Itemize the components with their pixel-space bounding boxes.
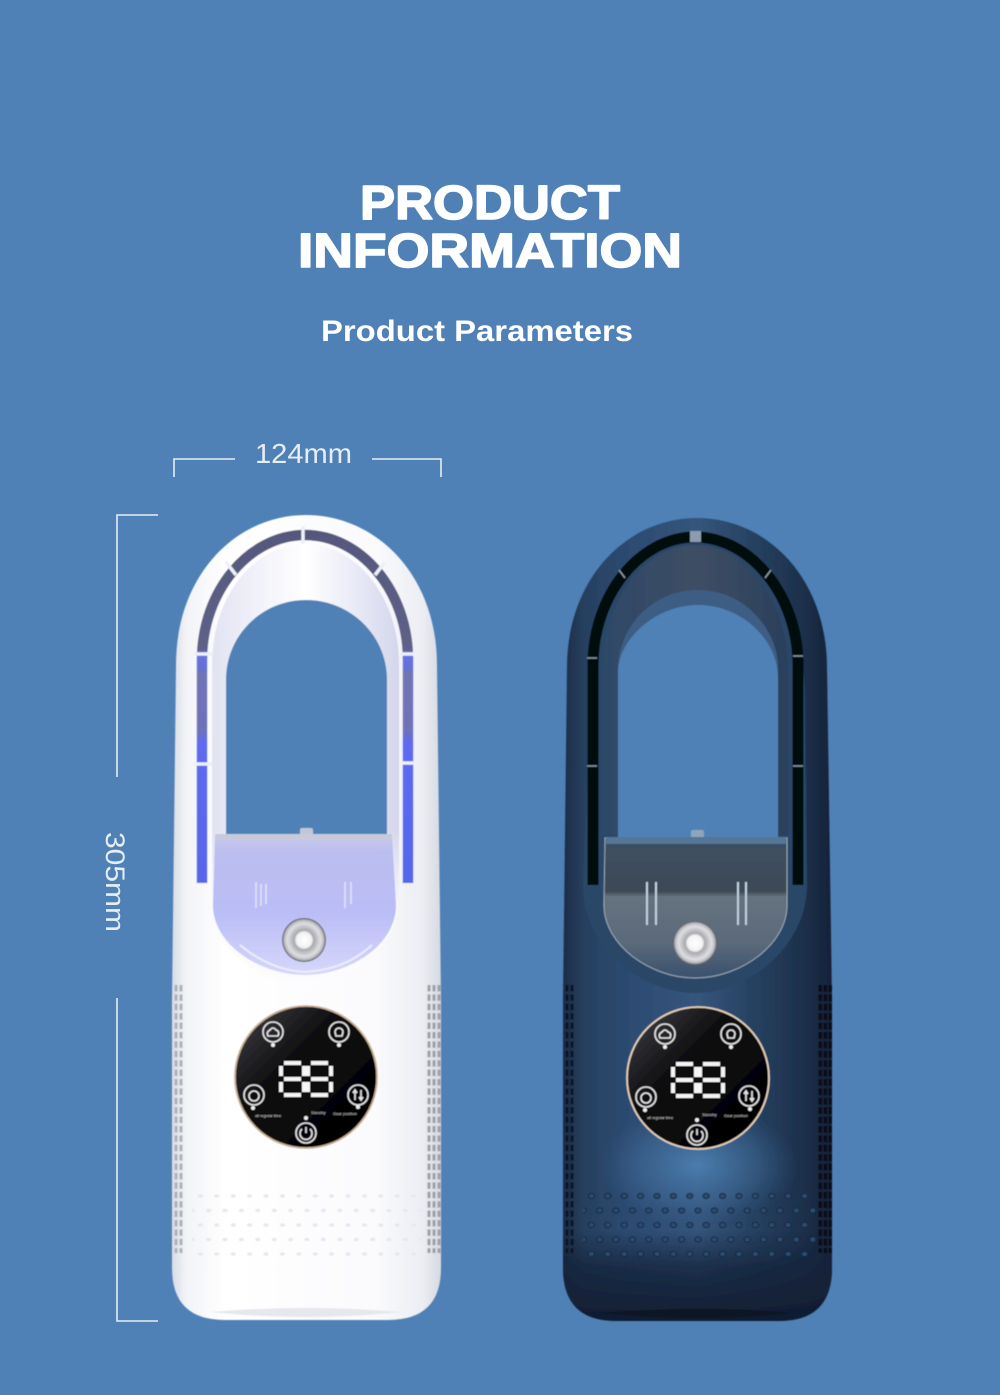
white fan collar arch: [212, 544, 399, 985]
white fan control panel: [235, 1006, 377, 1148]
width dimension: [174, 438, 441, 477]
white fan bottom dots: [192, 1190, 422, 1260]
dark fan base rim: [601, 1309, 793, 1318]
white fan body: [172, 515, 441, 1320]
width dimension: 124mm: [255, 438, 352, 469]
dark fan control panel: Standby: [702, 1112, 717, 1117]
dark fan knob: [673, 921, 717, 965]
title: PRODUCT: [360, 177, 620, 230]
digits: [673, 1064, 723, 1096]
dark fan control panel: [627, 1007, 769, 1149]
title: [298, 177, 682, 278]
dark fan side grills: [565, 985, 832, 1253]
dark fan opening: [618, 590, 778, 838]
white fan side grills: [174, 985, 441, 1253]
panel icons: [244, 1022, 368, 1143]
white fan control panel: Gear position: [333, 1111, 357, 1116]
title: INFORMATION: [298, 225, 682, 278]
dark fan air slot: [587, 531, 803, 885]
white fan opening: [226, 600, 387, 835]
dark fan water tank: [604, 830, 787, 978]
white fan water tank: [213, 828, 396, 975]
digits: [281, 1063, 331, 1095]
dark fan bottom dots: [583, 1190, 815, 1260]
white fan control panel: all regular time: [255, 1113, 282, 1118]
white fan air slot: [194, 526, 418, 883]
dark fan body: [563, 518, 832, 1321]
subtitle: Product Parameters: [321, 315, 633, 348]
dark fan control panel: Gear position: [724, 1113, 748, 1118]
dark fan: [563, 518, 832, 1321]
height dimension: 305mm: [100, 832, 130, 932]
white fan control panel: Standby: [311, 1110, 326, 1115]
dark fan body glow: [598, 1105, 798, 1225]
dark fan collar: [583, 535, 807, 993]
dark fan lower shade: [563, 1230, 832, 1321]
dark fan inner arch: [603, 545, 788, 835]
white fan knob: [282, 918, 326, 962]
dark fan control panel: all regular time: [647, 1115, 674, 1120]
white fan base rim: [210, 1308, 402, 1317]
white fan collar fade: [212, 830, 399, 985]
white fan: [172, 515, 441, 1320]
panel icons: [636, 1024, 759, 1145]
height dimension: [100, 515, 158, 1321]
